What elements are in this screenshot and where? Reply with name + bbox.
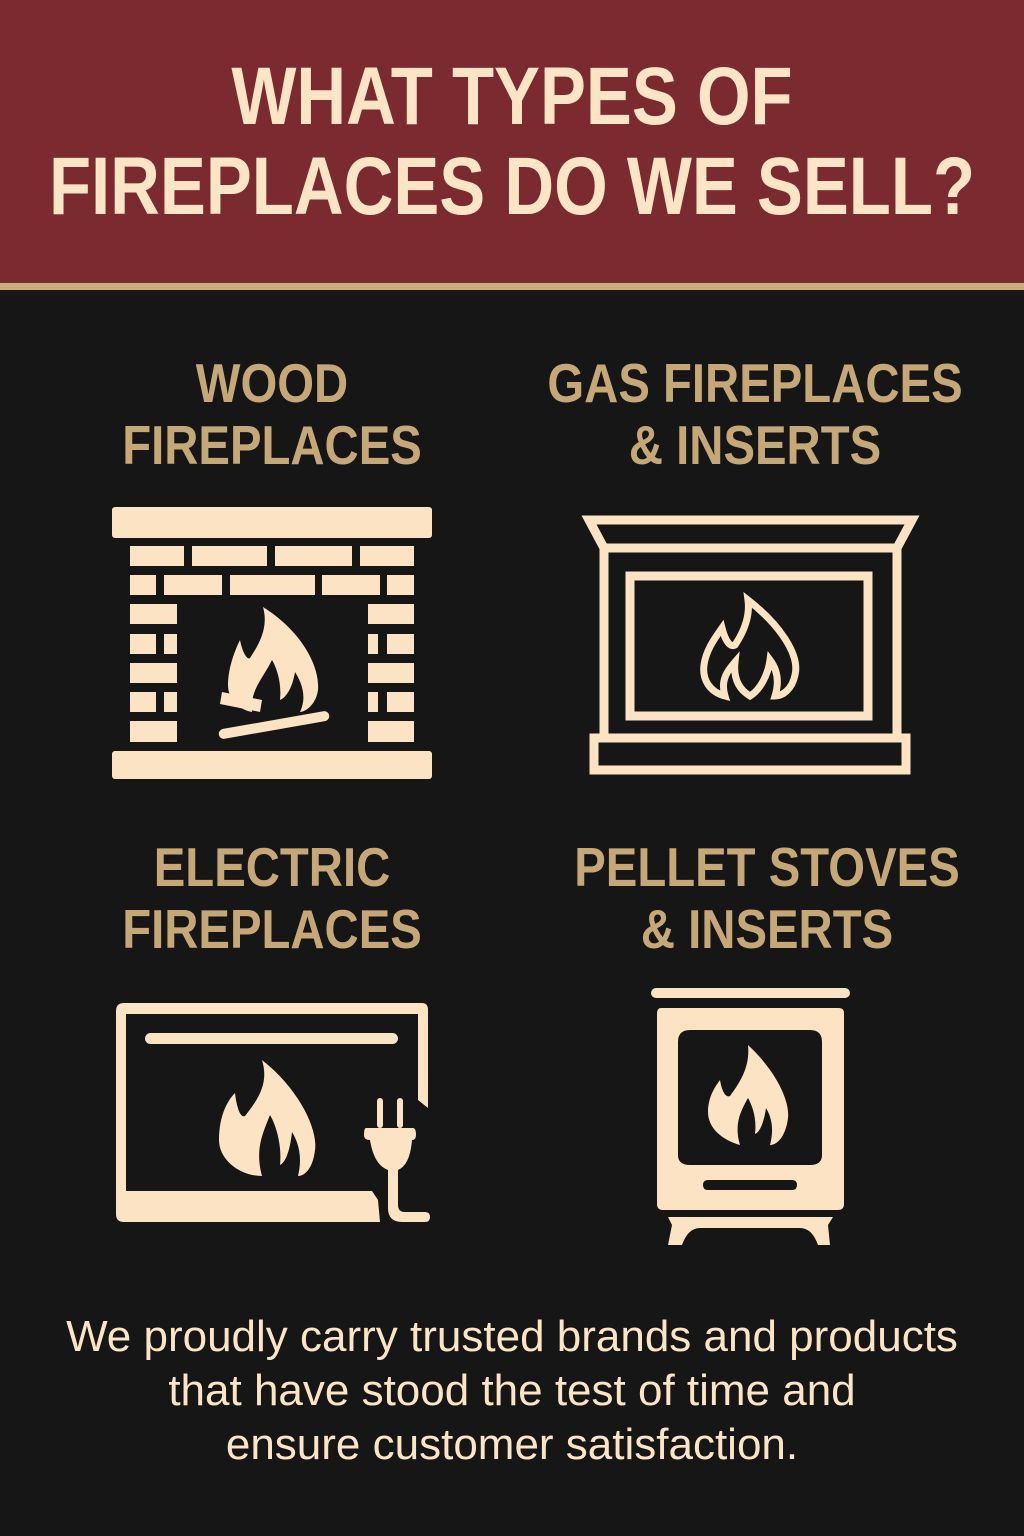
- heading: pellet stoves: & INSERTS: [641, 898, 893, 960]
- icon: electric fireplace: [116, 1003, 430, 1222]
- footer text: that have stood the test of time and: [168, 1366, 856, 1415]
- title: [49, 51, 975, 232]
- heading: electric fireplaces: [122, 836, 422, 960]
- heading: gas fireplaces: GAS FIREPLACES: [547, 352, 963, 414]
- heading: wood fireplaces: [122, 352, 422, 476]
- footer text: We proudly carry trusted brands and products: [66, 1312, 958, 1361]
- heading: electric fireplaces: ELECTRIC: [154, 836, 390, 898]
- heading: gas fireplaces: & INSERTS: [629, 414, 881, 476]
- footer text: [66, 1312, 958, 1469]
- heading: pellet stoves: [574, 836, 960, 960]
- heading: wood fireplaces: WOOD: [196, 352, 348, 414]
- heading: electric fireplaces: FIREPLACES: [122, 898, 422, 960]
- icon: pellet stove: [651, 988, 850, 1245]
- icon: gas fireplace: [589, 520, 912, 770]
- footer text: ensure customer satisfaction.: [226, 1420, 798, 1469]
- header band: [0, 0, 1024, 283]
- icon: wood fireplace: [112, 507, 432, 779]
- heading: pellet stoves: PELLET STOVES: [574, 836, 960, 898]
- heading: wood fireplaces: FIREPLACES: [122, 414, 422, 476]
- title: WHAT TYPES OF: [231, 51, 793, 142]
- title: FIREPLACES DO WE SELL?: [49, 141, 975, 232]
- heading: gas fireplaces: [547, 352, 963, 476]
